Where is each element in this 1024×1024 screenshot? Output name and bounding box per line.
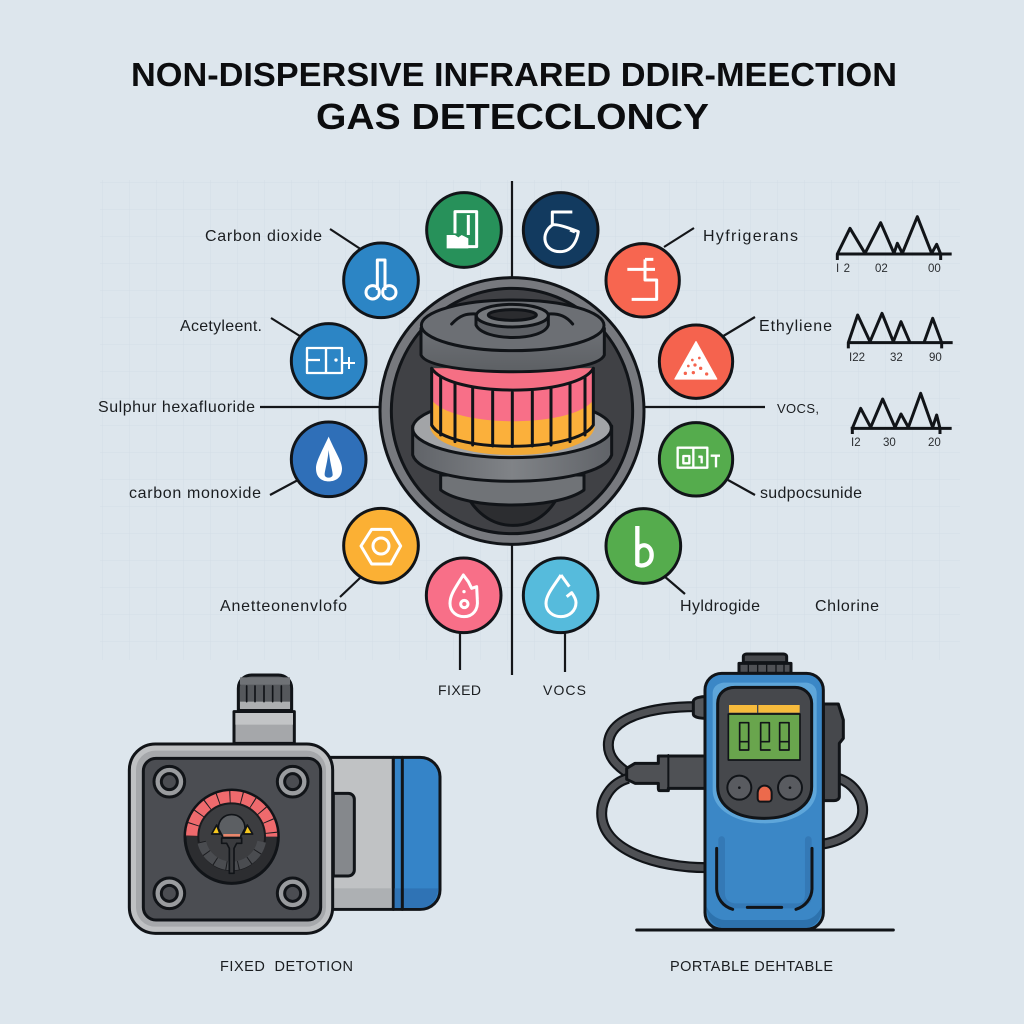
label: carbon dioxide: Carbon dioxide	[205, 228, 322, 245]
side body	[330, 757, 393, 909]
label: sudpocsunide: sudpocsunide	[760, 485, 862, 502]
label: sulphur hexafluoride: Sulphur hexafluoride	[98, 399, 255, 416]
title: NON-DISPERSIVE INFRARED DDIR-MEECTION	[131, 57, 897, 94]
chart: spectrum 2	[847, 313, 953, 364]
central sensor	[380, 278, 644, 544]
cables	[602, 707, 863, 868]
caption: portable detectable: PORTABLE DEHTABLE	[670, 959, 833, 975]
top hub	[476, 315, 548, 337]
label: chlorine: Chlorine	[815, 598, 879, 615]
red button	[758, 786, 772, 802]
label: vocs: VOCS	[543, 682, 586, 698]
label: hyfrigerans: Hyfrigerans	[703, 228, 798, 245]
chart: spectrum 2: I22	[849, 352, 865, 364]
fixed detector device	[129, 675, 440, 933]
label: carbon monoxide: carbon monoxide	[129, 485, 261, 502]
green screen	[728, 714, 800, 760]
label: hydrogide: Hyldrogide	[680, 598, 760, 615]
icon: green vessel	[427, 193, 501, 267]
title: GAS DETECCLONCY	[316, 96, 709, 137]
icon: coral triangle	[659, 325, 733, 398]
chart: spectrum 1	[836, 217, 952, 275]
dial	[185, 790, 278, 883]
chart: spectrum 3: 30	[883, 437, 896, 449]
icon: red glyph	[606, 244, 679, 317]
screws	[154, 766, 308, 909]
title	[131, 57, 897, 137]
label: ethylene: Ethyliene	[759, 318, 832, 335]
chart: spectrum 3: 20	[928, 437, 941, 449]
inner panel	[143, 758, 321, 920]
icon: pink flame	[426, 558, 501, 633]
bottom dome	[461, 477, 564, 525]
spectrum charts	[836, 217, 953, 449]
icon: green chip	[659, 423, 733, 496]
label: anetteonenvlofo: Anetteonenvlofo	[220, 598, 347, 615]
pocket	[717, 836, 812, 909]
device cap	[234, 675, 294, 743]
chart: spectrum 1: 02	[875, 263, 888, 275]
colored band	[432, 368, 593, 449]
orange lip	[431, 427, 594, 454]
connector plug	[627, 697, 707, 791]
icon: blue drop	[291, 422, 366, 497]
icon: blue panel	[291, 324, 366, 398]
icon: navy flask	[523, 193, 598, 267]
chart: spectrum 3: I2	[851, 437, 861, 449]
icon: cyan drop	[523, 558, 598, 633]
blue end	[393, 757, 440, 909]
chart: spectrum 1: I2	[836, 263, 850, 275]
lower small flange	[441, 475, 584, 505]
outer frame	[129, 744, 333, 933]
sensor housing ring	[380, 278, 644, 544]
connector lines	[260, 181, 765, 675]
side clip	[823, 704, 843, 801]
icon: green letter b	[606, 509, 681, 583]
chart: spectrum 2: 32	[890, 352, 903, 364]
top knob	[739, 654, 791, 673]
screen header	[729, 705, 800, 713]
caption: fixed detection: FIXED DETOTION	[220, 959, 353, 975]
chart: spectrum 1: 00	[928, 263, 941, 275]
body	[705, 673, 823, 929]
label: vocs right: VOCS,	[777, 401, 819, 416]
top cap	[421, 328, 604, 372]
icon: yellow hexagon	[344, 508, 418, 583]
side tab	[333, 793, 354, 876]
icon: blue loops	[344, 243, 418, 318]
chart: spectrum 3	[851, 393, 952, 449]
label: acetylene: Acetyleent.	[180, 318, 262, 335]
knobs	[727, 776, 802, 800]
ground line	[637, 925, 893, 934]
chart: spectrum 2: 90	[929, 352, 942, 364]
portable detector device	[602, 654, 893, 930]
gas labels	[98, 228, 879, 698]
face panel	[713, 683, 817, 823]
gas icon circles	[344, 193, 679, 318]
lower flange	[413, 426, 612, 481]
label: fixed: FIXED	[438, 682, 481, 698]
